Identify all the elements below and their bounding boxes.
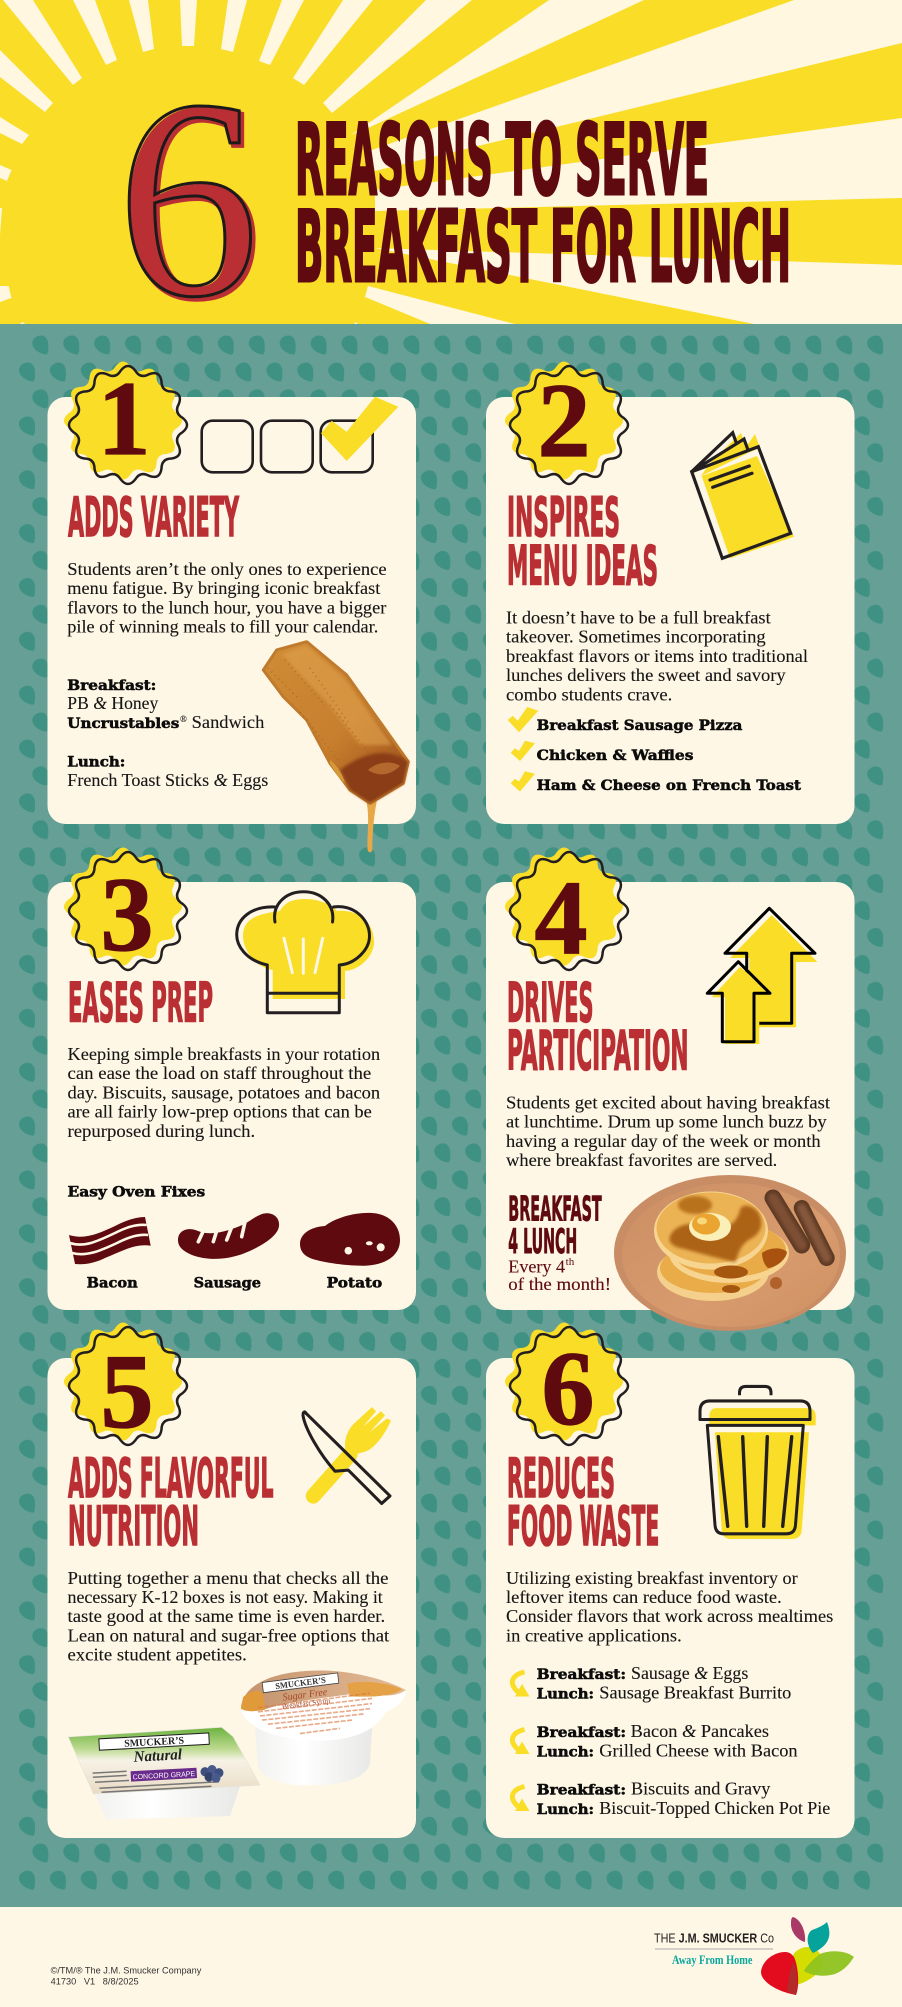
big numeral 6: 6 — [117, 42, 259, 356]
breakfast and lunch list — [67, 678, 268, 790]
icon: curved arrow — [512, 1786, 530, 1811]
badge 5: 5 — [100, 1333, 154, 1450]
icon: trash can — [700, 1386, 816, 1539]
body text: Consider flavors that work across mealtimes — [506, 1606, 833, 1626]
repurpose list: Breakfast: — [537, 1782, 626, 1798]
panel: 2 inspires menu ideas: MENU IDEAS — [507, 534, 658, 598]
panel: 3 eases prep: EASES PREP — [68, 972, 213, 1034]
body text: Students get excited about having breakfast — [506, 1092, 830, 1112]
panel: 6 reduces food waste — [486, 1322, 854, 1838]
body text: Keeping simple breakfasts in your rotation — [68, 1044, 380, 1064]
body text: It doesn’t have to be a full breakfast — [506, 607, 771, 627]
panel: 2 inspires menu ideas — [486, 361, 854, 824]
body text: breakfast flavors or items into traditional — [506, 646, 808, 666]
callout: breakfast 4 lunch: 4 LUNCH — [508, 1222, 577, 1262]
body text: menu fatigue. By bringing iconic breakfast — [67, 578, 380, 598]
repurpose list: Bacon & Pancakes — [631, 1721, 769, 1741]
breakfast and lunch list: Lunch: — [67, 755, 125, 771]
heading — [507, 1447, 659, 1558]
breakfast and lunch list: Sandwich — [192, 712, 264, 732]
callout: breakfast 4 lunch: of the month! — [508, 1274, 611, 1294]
repurpose list: Breakfast: — [537, 1667, 626, 1683]
photo: syrup cup: Breakfast Syrup — [281, 1696, 331, 1711]
icon: potato: Potato — [327, 1275, 382, 1291]
copyright text — [51, 1965, 202, 1987]
photo: jam packet: CONCORD GRAPE — [132, 1770, 196, 1781]
icon: chef hat — [237, 892, 374, 1013]
photo: pancakes and sausage plate — [614, 1175, 846, 1331]
photo: syrup cup — [241, 1671, 406, 1786]
breakfast and lunch list: French Toast Sticks & Eggs — [67, 770, 268, 790]
badge 3 — [64, 847, 187, 973]
breakfast and lunch list: Breakfast: — [67, 678, 156, 694]
photo: syrup cup: SMUCKER’S — [275, 1675, 327, 1691]
icon: sausage: Sausage — [194, 1275, 261, 1291]
panel: 5 adds flavorful nutrition: ADDS FLAVORFUL — [68, 1447, 274, 1510]
repurpose list: Biscuit-Topped Chicken Pot Pie — [599, 1798, 830, 1818]
heading: DRIVES — [507, 972, 594, 1034]
photo: jam packet: SMUCKER’S — [124, 1735, 185, 1750]
panel: 4 drives participation: BREAKFAST — [508, 1190, 602, 1230]
badge 4 — [505, 847, 628, 976]
copyright text: ©/TM/® The J.M. Smucker Company — [51, 1965, 202, 1976]
body text: leftover items can reduce food waste. — [506, 1587, 782, 1607]
body text: in creative applications. — [506, 1625, 682, 1645]
badge 1 — [64, 360, 187, 484]
body text: takeover. Sometimes incorporating — [506, 626, 766, 646]
photo: jam packet — [68, 1727, 260, 1820]
photo: french toast stick — [263, 642, 408, 852]
panel: 1 adds variety: ADDS VARIETY — [68, 486, 239, 549]
badge 2 — [505, 361, 628, 484]
body text: Lean on natural and sugar-free options that — [68, 1625, 389, 1645]
breakfast and lunch list: Uncrustables — [67, 716, 179, 732]
checklist: Chicken & Waffles — [537, 748, 694, 764]
heading: NUTRITION — [68, 1495, 199, 1558]
heading — [507, 486, 658, 598]
callout: breakfast 4 lunch — [508, 1190, 611, 1294]
icon: potato — [300, 1213, 400, 1291]
header sunburst — [0, 0, 902, 324]
badge 3: 3 — [100, 856, 154, 973]
body text — [506, 607, 808, 704]
repurpose list: Sausage & Eggs — [631, 1663, 748, 1683]
repurpose list: Biscuits and Gravy — [631, 1778, 770, 1798]
body text: lunches delivers the sweet and savory — [506, 665, 786, 685]
checklist: Ham & Cheese on French Toast — [537, 778, 802, 794]
body text: at lunchtime. Drum up some lunch buzz by — [506, 1112, 827, 1132]
icon: sausage — [178, 1213, 279, 1291]
photo: syrup cup: Sugar Free — [282, 1687, 328, 1704]
body text: flavors to the lunch hour, you have a bigger — [67, 597, 386, 617]
icon: checkboxes — [202, 397, 398, 472]
callout: breakfast 4 lunch: th — [566, 1257, 574, 1268]
logo: the j.m. smucker co: THE J.M. SMUCKER Co — [654, 1931, 774, 1946]
badge 6 — [505, 1322, 628, 1447]
breakfast and lunch list: PB & Honey — [67, 693, 158, 713]
breakfast and lunch list: ® — [180, 714, 187, 724]
icon: fork and knife — [303, 1407, 391, 1503]
icon: curved arrow — [512, 1730, 530, 1754]
body text: day. Biscuits, sausage, potatoes and bacon — [68, 1082, 380, 1102]
body text: having a regular day of the week or month — [506, 1131, 821, 1151]
teal patterned background — [0, 324, 902, 1907]
checklist: Breakfast Sausage Pizza — [537, 718, 742, 734]
body text: are all fairly low-prep options that can be — [68, 1102, 372, 1122]
repurpose list: Lunch: — [537, 1686, 594, 1702]
icon: bacon — [69, 1217, 151, 1291]
copyright text: 41730 V1 8/8/2025 — [51, 1976, 139, 1987]
badge 5 — [64, 1322, 187, 1450]
callout: breakfast 4 lunch: Every 4 — [508, 1256, 565, 1276]
photo: jam packet: Natural — [132, 1746, 183, 1766]
repurpose list — [512, 1663, 830, 1818]
heading: REDUCES — [507, 1447, 615, 1510]
panel: 3 eases prep — [48, 847, 416, 1310]
checklist — [508, 707, 802, 794]
body text: taste good at the same time is even harder. — [68, 1606, 385, 1626]
body text — [68, 1044, 380, 1141]
repurpose list: Breakfast: — [537, 1725, 626, 1741]
icon: menu booklet — [692, 433, 794, 558]
heading — [507, 972, 688, 1083]
body text: where breakfast favorites are served. — [506, 1150, 777, 1170]
badge 1: 1 — [98, 360, 150, 477]
panel: 5 adds flavorful nutrition — [48, 1322, 416, 1838]
repurpose list: Lunch: — [537, 1802, 594, 1818]
icon: bacon: Bacon — [87, 1275, 138, 1291]
body text: can ease the load on staff throughout the — [68, 1063, 371, 1083]
logo: the j.m. smucker co: Away From Home — [672, 1953, 753, 1967]
title — [295, 104, 791, 305]
body text — [68, 1568, 389, 1665]
panel: 6 reduces food waste: FOOD WASTE — [507, 1495, 659, 1558]
panel: 1 adds variety — [48, 360, 416, 852]
logo: the j.m. smucker co — [654, 1917, 854, 1995]
body text — [67, 559, 387, 637]
footer — [0, 1907, 902, 2007]
body text: Putting together a menu that checks all the — [68, 1568, 389, 1588]
repurpose list: Grilled Cheese with Bacon — [599, 1740, 798, 1760]
big numeral 6: 6 — [120, 45, 262, 359]
body text: Utilizing existing breakfast inventory or — [506, 1568, 798, 1588]
body text — [506, 1568, 833, 1645]
body text: excite student appetites. — [68, 1645, 247, 1665]
repurpose list: Lunch: — [537, 1744, 594, 1760]
heading — [68, 1447, 274, 1558]
body text: Students aren’t the only ones to experience — [67, 559, 387, 579]
body text: pile of winning meals to fill your calendar. — [67, 617, 378, 637]
icon: curved arrow — [512, 1672, 530, 1696]
badge 6: 6 — [542, 1330, 594, 1447]
badge 2: 2 — [538, 362, 590, 479]
subheading: Easy Oven Fixes — [68, 1185, 205, 1201]
icon: up arrows — [707, 908, 817, 1044]
body text: combo students crave. — [506, 684, 672, 704]
body text — [506, 1092, 830, 1170]
panel: 4 drives participation — [486, 847, 854, 1331]
repurpose list: Sausage Breakfast Burrito — [599, 1682, 791, 1702]
badge 4: 4 — [534, 859, 588, 976]
body text: necessary K-12 boxes is not easy. Making it — [68, 1587, 383, 1607]
body text: repurposed during lunch. — [68, 1121, 255, 1141]
heading: INSPIRES — [507, 486, 620, 549]
